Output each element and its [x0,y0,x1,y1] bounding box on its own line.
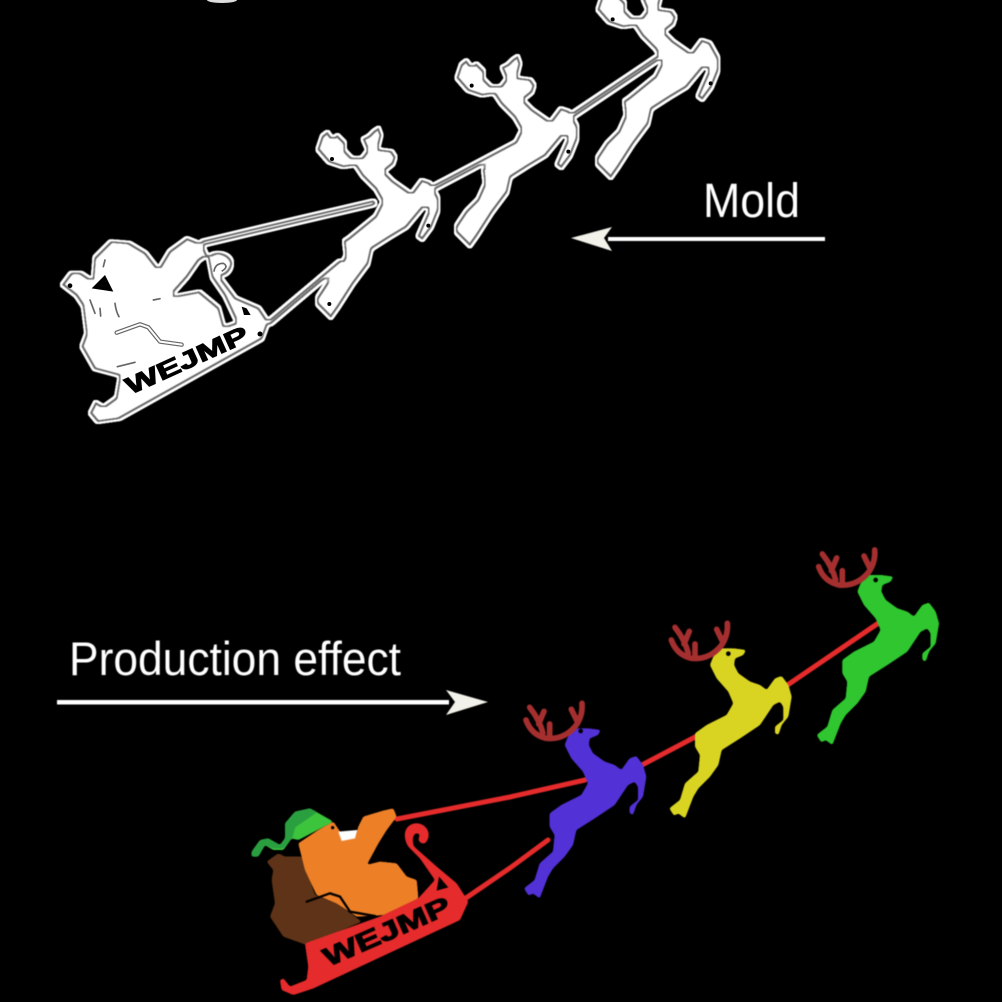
mold reindeer middle [455,54,578,248]
white beard [338,830,357,841]
sleigh small hole [437,877,448,891]
panel: mold die cut [60,0,719,423]
green reindeer [817,550,939,745]
arrow: pointing left to mold [571,227,825,251]
santa eye [92,275,113,292]
mold silhouette: reindeer, straps and sleigh [60,0,719,423]
mold sleigh with santa [60,237,270,423]
sleigh small hole [242,307,251,315]
mold sleigh dot [258,332,262,336]
belt highlight [117,324,182,345]
top edge fragment [207,0,237,3]
mold reindeer holes [327,17,713,306]
label: Production effect: Production effect [69,632,401,685]
mold sleigh lettering: WEJMP [121,321,253,400]
arrow: pointing right to production effect [57,690,488,715]
mold reindeer rear [316,126,439,320]
orange santa [298,808,418,917]
yellow reindeer [669,623,792,818]
panel: coloured production effect [252,550,939,995]
pompom hole [68,283,72,288]
coloured sleigh lettering: WEJMP [318,890,455,972]
purple reindeer [524,703,646,898]
belt line [307,893,375,916]
hat darker crown [252,808,317,857]
mold santa details [68,260,251,367]
red harness straps [397,622,880,898]
red sleigh [280,823,468,995]
label: Mold: Mold [703,175,800,228]
green hat [252,808,333,857]
belt line [117,324,182,345]
mold reindeer front [596,0,719,180]
santa eye [331,826,334,829]
detail marks [90,260,160,367]
curl inner line [214,263,226,272]
coloured santa and sleigh [252,808,468,995]
brown sack [267,853,362,945]
mold harness straps [203,58,658,322]
